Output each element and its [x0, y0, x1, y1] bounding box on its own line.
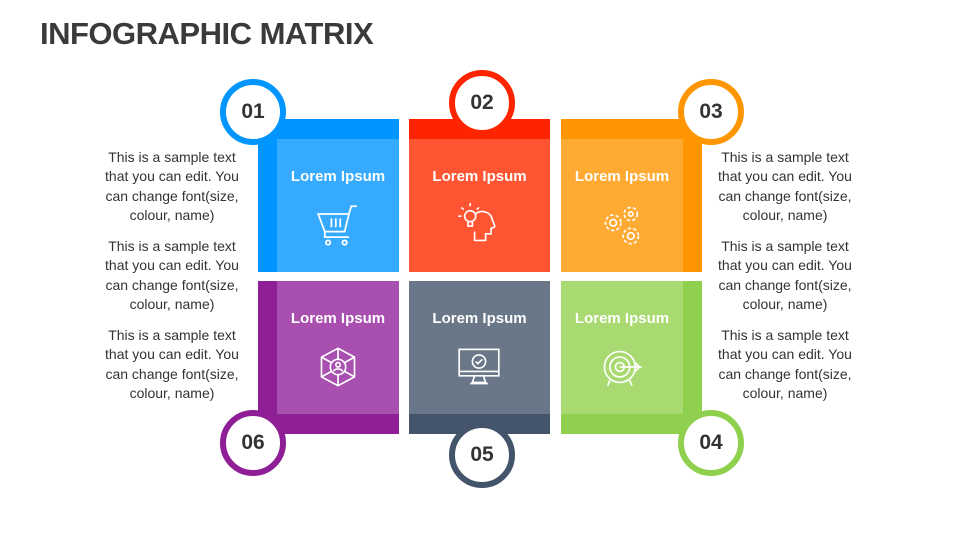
right text 2: that you can edit. You	[718, 257, 852, 273]
right text 3: can change font(size,	[718, 366, 852, 382]
tile 3 orange	[561, 119, 702, 272]
tile 6 green: Lorem Ipsum	[575, 310, 669, 327]
left text 3	[105, 327, 239, 401]
circle 05	[449, 422, 515, 488]
left text 1: that you can edit. You	[105, 168, 239, 184]
right text 3: colour, name)	[743, 385, 827, 401]
circle 03	[678, 79, 744, 145]
circle 03: 03	[699, 100, 723, 123]
right text 1: that you can edit. You	[718, 168, 852, 184]
left text 2: that you can edit. You	[105, 257, 239, 273]
circle 02	[449, 70, 515, 136]
icon: monitor	[458, 348, 500, 384]
icon: gears	[604, 206, 640, 244]
left text 2: can change font(size,	[105, 277, 239, 293]
title: INFOGRAPHIC MATRIX	[40, 16, 373, 51]
left text 3: This is a sample text	[108, 327, 236, 343]
tile 2 red	[409, 119, 550, 272]
right text 3: that you can edit. You	[718, 346, 852, 362]
tile 1 blue	[258, 119, 399, 272]
circle 04: 04	[699, 431, 723, 454]
circle 04	[678, 410, 744, 476]
icon: cart	[317, 205, 357, 246]
circle 06: 06	[241, 431, 265, 454]
circle 06	[220, 410, 286, 476]
right text 3	[718, 327, 852, 401]
left text 1: This is a sample text	[108, 149, 236, 165]
left text 1: colour, name)	[130, 207, 214, 223]
left text 3: colour, name)	[130, 385, 214, 401]
circle 02: 02	[470, 91, 494, 114]
tile 3 orange: Lorem Ipsum	[575, 168, 669, 185]
left text 3: that you can edit. You	[105, 346, 239, 362]
left text 2: This is a sample text	[108, 238, 236, 254]
left text 3: can change font(size,	[105, 366, 239, 382]
left text 1: can change font(size,	[105, 188, 239, 204]
tile 6 green	[561, 281, 702, 434]
right text 2: colour, name)	[743, 296, 827, 312]
icon: head idea	[458, 203, 496, 242]
right text 2: can change font(size,	[718, 277, 852, 293]
circle 05: 05	[470, 443, 494, 466]
tile 1 blue: Lorem Ipsum	[291, 168, 385, 185]
circle 01: 01	[241, 100, 265, 123]
left text 1	[105, 149, 239, 223]
tile 4 purple: Lorem Ipsum	[291, 310, 385, 327]
right text 2: This is a sample text	[721, 238, 849, 254]
tile 5 gray: Lorem Ipsum	[432, 310, 527, 327]
icon: target	[604, 350, 642, 386]
tile 4 purple	[258, 281, 399, 434]
right text 1	[718, 149, 852, 223]
right text 1: can change font(size,	[718, 188, 852, 204]
tile 2 red: Lorem Ipsum	[432, 168, 527, 185]
tile 5 gray	[409, 281, 550, 434]
icon: network	[320, 347, 356, 387]
right text 3: This is a sample text	[721, 327, 849, 343]
circle 01	[220, 79, 286, 145]
right text 1: colour, name)	[743, 207, 827, 223]
right text 1: This is a sample text	[721, 149, 849, 165]
right text 2	[718, 238, 852, 312]
left text 2	[105, 238, 239, 312]
left text 2: colour, name)	[130, 296, 214, 312]
